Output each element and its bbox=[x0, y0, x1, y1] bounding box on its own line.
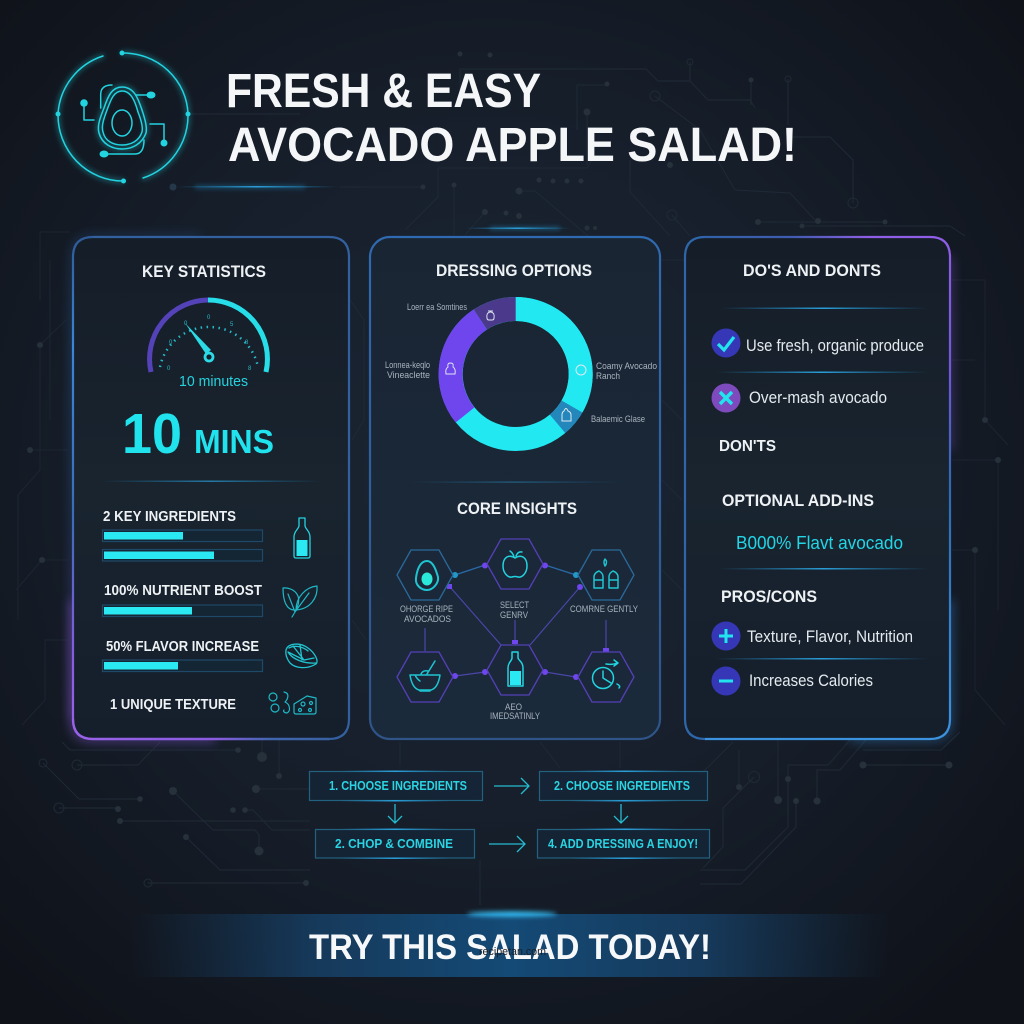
icon: bottle bbox=[294, 518, 310, 558]
flow step 2 bottom: 2. CHOP & COMBINE bbox=[335, 836, 453, 851]
stat: flavor increase bbox=[102, 639, 262, 672]
stat: unique texture: 1 UNIQUE TEXTURE bbox=[110, 697, 236, 713]
title bbox=[226, 65, 797, 172]
gauge: 5 bbox=[230, 322, 234, 328]
donut labels: Vineaclette bbox=[387, 370, 430, 381]
con item bbox=[712, 666, 873, 696]
logo: circuit avocado icon bbox=[56, 50, 190, 184]
flow step 1: 1. CHOOSE INGREDIENTS bbox=[329, 778, 467, 793]
heading: pros and cons: PROS/CONS bbox=[721, 587, 817, 606]
donut labels bbox=[385, 302, 657, 425]
heading: optional add-ins: OPTIONAL ADD-INS bbox=[722, 492, 874, 510]
title underline glow bbox=[170, 184, 337, 190]
flow arrows bbox=[388, 778, 628, 852]
watermark: recipetan.com bbox=[479, 946, 546, 958]
insight labels bbox=[400, 600, 639, 722]
stat: 2 key ingredients bbox=[102, 509, 262, 561]
insight labels: COMRNE GENTLY bbox=[570, 604, 639, 615]
big stat: 10 mins: MINS bbox=[194, 423, 274, 460]
heading: core insights: CORE INSIGHTS bbox=[457, 499, 577, 518]
donut chart bbox=[451, 309, 581, 439]
big stat: 10 mins: 10 bbox=[122, 402, 182, 466]
insight labels: AVOCADOS bbox=[404, 614, 451, 625]
con item: Increases Calories bbox=[749, 671, 873, 690]
background circuit nodes bbox=[27, 52, 1001, 886]
big stat: 10 mins bbox=[122, 402, 274, 466]
gauge: 8 bbox=[248, 366, 252, 372]
insight labels: OHORGE RIPE bbox=[400, 604, 453, 615]
gauge: 0 bbox=[169, 340, 173, 346]
cta text: TRY THIS SALAD TODAY! bbox=[309, 928, 711, 967]
don't item: Over-mash avocado bbox=[749, 388, 887, 407]
hexagon: bottle bbox=[487, 645, 543, 695]
hexagon: apple bbox=[487, 539, 543, 589]
gauge bbox=[150, 300, 267, 372]
title: FRESH & EASY bbox=[226, 65, 541, 118]
pro item: Texture, Flavor, Nutrition bbox=[747, 627, 913, 646]
heading: key statistics: KEY STATISTICS bbox=[142, 262, 266, 281]
hexagon: bowl bbox=[397, 652, 453, 702]
insight labels: SELECT bbox=[500, 600, 529, 611]
panel: do's and don'ts bbox=[685, 237, 950, 739]
donut labels: Coamy Avocado bbox=[596, 361, 657, 372]
hexagon: timer bbox=[578, 652, 634, 702]
insight labels: IMEDSATINLY bbox=[490, 711, 541, 722]
donut labels: Balaemic Glase bbox=[591, 414, 645, 425]
do item: Use fresh, organic produce bbox=[746, 336, 924, 355]
donut labels: Loerr ea Somtines bbox=[407, 302, 467, 313]
panel: key statistics bbox=[73, 237, 349, 739]
flow step 1 bbox=[310, 770, 482, 802]
glow above middle panel bbox=[465, 227, 570, 230]
pro item bbox=[712, 622, 913, 650]
don't item bbox=[712, 384, 887, 412]
insight labels: GENRV bbox=[500, 610, 529, 621]
flow step 2 top: 2. CHOOSE INGREDIENTS bbox=[554, 778, 690, 793]
donut labels: Ranch bbox=[596, 371, 620, 382]
flow step 2 top bbox=[540, 770, 708, 802]
stat: nutrient boost bbox=[102, 583, 262, 616]
donut segment icons bbox=[446, 311, 586, 421]
icon: texture bbox=[269, 692, 316, 714]
gauge label: 10 minutes bbox=[179, 373, 248, 390]
heading: do's and don'ts: DO'S AND DONTS bbox=[743, 261, 881, 280]
title: AVOCADO APPLE SALAD! bbox=[228, 119, 797, 172]
heading: dressing options: DRESSING OPTIONS bbox=[436, 261, 592, 280]
stat: flavor increase: 50% FLAVOR INCREASE bbox=[106, 639, 259, 655]
heading: don'ts: DON'TS bbox=[719, 438, 776, 455]
gauge: 8 bbox=[245, 340, 249, 346]
network connectors bbox=[425, 565, 606, 677]
add-in text: B000% Flavt avocado bbox=[736, 533, 903, 553]
stat: nutrient boost: 100% NUTRIENT BOOST bbox=[104, 583, 262, 599]
network nodes bbox=[447, 562, 609, 680]
flow step 2 bottom bbox=[316, 828, 474, 859]
donut labels: Lonnea-keqlo bbox=[385, 360, 430, 371]
do item bbox=[712, 328, 924, 358]
stat: 2 key ingredients: 2 KEY INGREDIENTS bbox=[103, 509, 236, 525]
hexagon: shakers bbox=[578, 550, 634, 600]
icon: leaves bbox=[283, 586, 317, 617]
gauge: 0 bbox=[167, 366, 171, 372]
gauge: 0 bbox=[207, 315, 211, 321]
hexagon: choose avocados bbox=[397, 550, 453, 600]
insight labels: AEO bbox=[505, 702, 522, 713]
flow step 4 bbox=[538, 828, 710, 859]
gauge: 0 bbox=[184, 321, 188, 327]
panel: dressing options and core insights bbox=[370, 237, 660, 739]
icon: citrus bbox=[286, 644, 317, 668]
call to action banner bbox=[130, 912, 890, 977]
flow step 4: 4. ADD DRESSING A ENJOY! bbox=[548, 836, 698, 851]
